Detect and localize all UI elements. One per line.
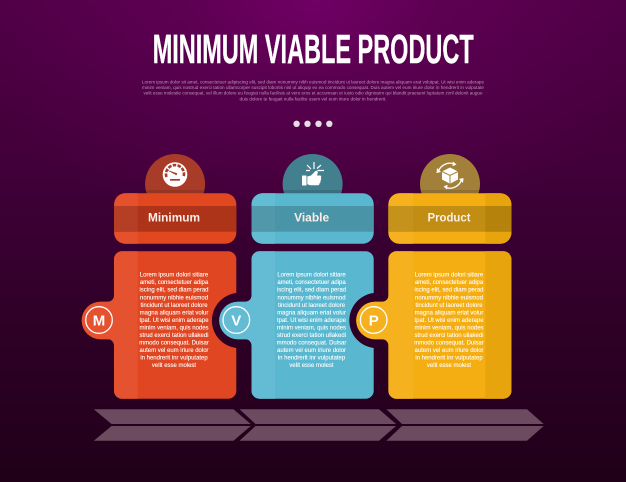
badge M — [86, 307, 112, 333]
body text — [139, 271, 209, 369]
body text: minim veniam, quis nodes — [139, 324, 209, 331]
icon: box with cycle arrows — [420, 154, 480, 214]
body text — [277, 271, 347, 369]
label: Minimum — [148, 210, 200, 224]
body text: strud exerci tation ullakedi — [414, 332, 484, 339]
body text: velit esse molest — [427, 362, 471, 369]
body text: velit esse molest — [289, 362, 334, 369]
body text: tincidunt ut laoreet dolore — [140, 302, 208, 309]
body text: nonummy nibhie euismod — [277, 294, 346, 301]
body text: tincidunt ut laoreet dolore — [278, 302, 346, 309]
body text: strud exerci tation ullakedi — [277, 332, 346, 339]
badge V: V — [231, 312, 241, 330]
body text: autem vel eum iriure dolor — [139, 347, 209, 354]
intro paragraph: velit esse molestie consequat, vel illum dolore eu feugiat nulla facilisis at vero eros et accumsan et iusto odio dignissim qui blandit praesent luptatum zzril delenit augue — [144, 91, 483, 97]
body card — [212, 251, 377, 401]
body text: tpat. Ut wisi enim aderape — [139, 317, 209, 324]
badge P — [360, 307, 387, 333]
body text: Lorem ipsum dolori sitiare — [140, 271, 209, 279]
chevron arrows timeline — [94, 409, 544, 441]
badge V — [223, 307, 250, 333]
body text: tincidunt ut laoreet dolore — [415, 302, 483, 309]
intro paragraph: duis dolore te feugait nulla facilisi usem vel eum iriure dolor in hendrerit. — [240, 96, 386, 102]
column: Viable — [212, 154, 377, 401]
label: Viable — [294, 210, 329, 224]
body text: Lorem ipsum dolori sitiare — [415, 271, 484, 279]
intro paragraph — [142, 79, 484, 102]
body text: mmodo consequat. Duisar — [139, 339, 209, 346]
column: Product — [350, 154, 515, 401]
body text: ameti, consectetuer adipa — [140, 279, 209, 286]
body card — [75, 251, 240, 401]
intro paragraph: minim veniam, quis nostrud exerci tation ullamcorper suscipit lobortis nisl ut aliquip ex ea commodo consequat. Duis autem vel eum iriure dolor in hendrerit in vulputate — [142, 85, 484, 91]
body text: tpat. Ut wisi enim aderape — [277, 317, 347, 324]
body text: mmodo consequat. Duisar — [414, 339, 484, 346]
intro paragraph: Lorem ipsum dolor sit amet, consectetuer adipiscing elit, sed diam nonummy nibh euismod tincidunt ut laoreet dolore magna aliquam erat volutpat. Ut wisi enim aderape — [142, 79, 484, 85]
body text: mmodo consequat. Duisar — [277, 339, 346, 346]
body text: minim veniam, quis nodes — [414, 324, 484, 331]
header card — [388, 193, 512, 244]
body text: autem vel eum iriure dolor — [277, 347, 346, 354]
body text: ameti, consectetuer adipa — [415, 279, 484, 286]
body text — [414, 271, 484, 369]
body text: iscing elit, sed diam perad — [414, 286, 484, 294]
pagination dots — [293, 121, 332, 127]
header card — [114, 193, 237, 244]
body text: Lorem ipsum dolori sitiare — [277, 271, 346, 279]
icon: speedometer gauge — [145, 154, 205, 214]
icon: thumbs up — [283, 154, 343, 214]
body text: nonummy nibhie euismod — [140, 294, 209, 301]
body text: magna aliquam eriat volur — [415, 309, 483, 316]
body text: ameti, consectetuer adipa — [277, 279, 346, 286]
body text: in hendrerit inr vulputatep — [278, 354, 346, 362]
label: Product — [428, 210, 470, 224]
body text: iscing elit, sed diam perad — [139, 286, 209, 294]
body text: nonummy nibhie euismod — [415, 294, 484, 301]
body text: minim veniam, quis nodes — [277, 324, 346, 331]
column: Minimum — [75, 154, 240, 401]
body text: tpat. Ut wisi enim aderape — [414, 317, 484, 324]
body text: in hendrerit inr vulputatep — [415, 354, 483, 362]
body text: in hendrerit inr vulputatep — [140, 354, 208, 362]
header card — [251, 193, 374, 244]
badge P: P — [369, 312, 379, 330]
badge M: M — [93, 312, 105, 330]
body text: magna aliquam eriat volur — [277, 309, 346, 316]
body text: magna aliquam eriat volur — [140, 309, 208, 316]
body card — [350, 251, 515, 401]
body text: iscing elit, sed diam perad — [277, 286, 347, 294]
body text: velit esse molest — [152, 362, 196, 369]
body text: autem vel eum iriure dolor — [414, 347, 484, 354]
body text: strud exerci tation ullakedi — [139, 332, 209, 339]
